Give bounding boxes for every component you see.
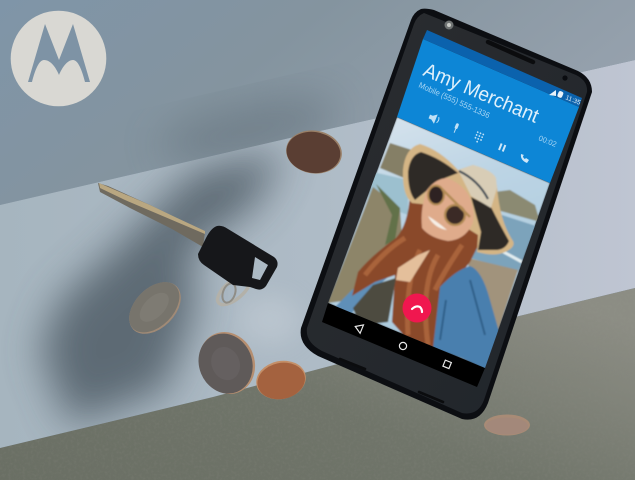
denim jacket: [433, 266, 500, 370]
far cliff: [380, 143, 412, 178]
hair: [352, 190, 481, 350]
status icons: [549, 90, 564, 98]
icon: batwing M: [28, 24, 90, 82]
icon: coin top: [283, 127, 345, 177]
icon: home button: [399, 342, 407, 350]
screen: [322, 30, 582, 387]
status time: 11:35: [564, 94, 582, 107]
icon: coin left: [119, 272, 191, 344]
text: caller number: Mobile (555) 555-1336: [417, 81, 492, 120]
icon: dialpad: [473, 131, 484, 144]
icon: penny: [253, 356, 309, 404]
ground speckle texture: [0, 280, 635, 480]
status bar: [423, 30, 582, 107]
hat shade right: [471, 197, 509, 250]
face: [422, 178, 474, 241]
icon: lower speaker right: [419, 392, 443, 402]
hat brim: [403, 144, 514, 254]
key head: [198, 226, 278, 290]
icon: hang up handset: [412, 306, 422, 312]
icon: falling car key: [98, 183, 278, 310]
left sea: [368, 172, 408, 215]
logo: Motorola badge: [11, 11, 106, 106]
heading: caller name: Amy Merchant: [420, 59, 542, 128]
smile: [428, 216, 447, 230]
phone body: [301, 9, 592, 420]
sunglasses: [428, 186, 444, 204]
icon: add call: [521, 154, 529, 163]
icon: speaker: [427, 112, 440, 125]
icon: hold: [498, 143, 506, 152]
panel: ground: [0, 280, 635, 480]
icon: front flash: [444, 20, 454, 30]
icon: recents button: [443, 360, 451, 369]
button: end call: [402, 294, 432, 322]
panel: contact photo: [328, 117, 550, 370]
right hill: [494, 190, 540, 222]
nav bar: [322, 303, 485, 387]
phone: [301, 9, 592, 420]
panel: call header: [397, 39, 579, 183]
panel: ledge top surface: [0, 0, 635, 172]
icon: back button: [354, 322, 363, 333]
beach: [467, 258, 518, 330]
icon: lower speaker left: [340, 359, 365, 369]
right sea: [471, 214, 535, 272]
dark top: [353, 278, 396, 325]
icon: mute mic: [453, 123, 459, 133]
hat crown: [458, 165, 497, 208]
key ring: [213, 270, 255, 310]
icon: large coin: [189, 323, 264, 403]
shadow on the concrete: [40, 150, 285, 425]
icon: speaker slot: [488, 42, 533, 62]
icon: coin on ground: [484, 414, 530, 436]
left denim collar: [335, 277, 387, 313]
text: call duration: 00:02: [537, 134, 558, 149]
cliff foreground: [328, 187, 402, 303]
icon: front camera: [562, 75, 568, 81]
chest: [396, 250, 430, 282]
